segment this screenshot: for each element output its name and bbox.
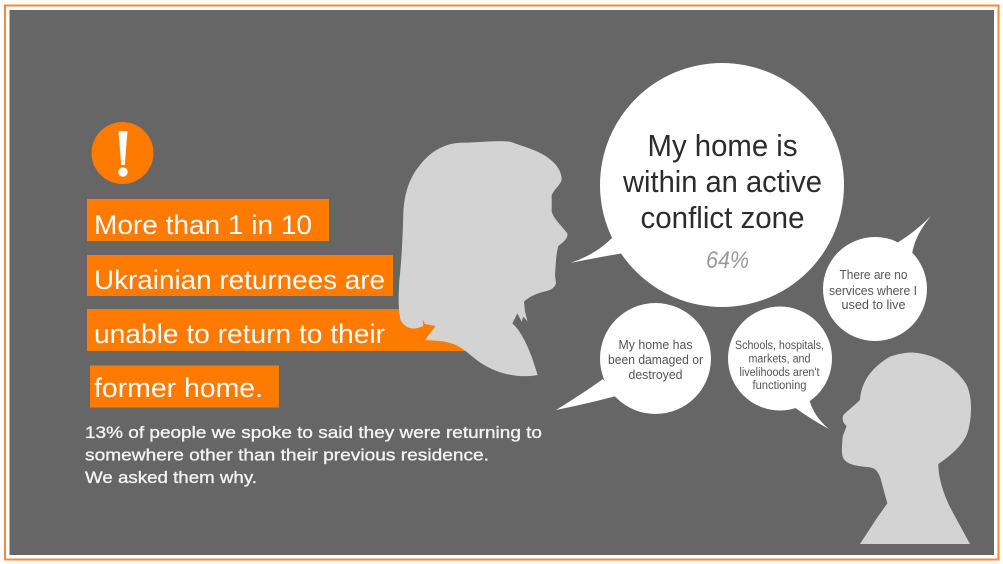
- callout: home damaged: been damaged or: [608, 352, 704, 367]
- callout: no services: There are no: [840, 268, 908, 282]
- text block: explanation: somewhere other than their previous residence.: [85, 446, 489, 464]
- callout: services not functioning: livelihoods aren't: [740, 367, 820, 379]
- callout: home damaged: My home has: [618, 337, 693, 352]
- callout: active conflict zone: My home is: [648, 128, 798, 163]
- heading: orange highlighted headline: More than 1 in 10: [94, 210, 312, 240]
- callout: services not functioning: functioning: [752, 380, 806, 392]
- callout: active conflict zone: within an active: [622, 164, 822, 199]
- text block: explanation: [85, 423, 542, 487]
- heading: orange highlighted headline: Ukrainian returnees are: [94, 265, 385, 295]
- callout: home damaged: [556, 303, 711, 414]
- callout: active conflict zone: [570, 63, 844, 307]
- text block: explanation: We asked them why.: [85, 468, 257, 487]
- callout: services not functioning: Schools, hospitals,: [735, 340, 824, 352]
- heading: orange highlighted headline: [87, 199, 467, 408]
- callout: active conflict zone: 64%: [706, 247, 749, 274]
- heading: orange highlighted headline: former home.: [94, 373, 263, 403]
- callout: no services: services where I: [829, 284, 917, 298]
- callout: services not functioning: [728, 306, 832, 429]
- callout: services not functioning: markets, and: [748, 354, 810, 366]
- callout: no services: [823, 216, 931, 341]
- icon: man silhouette: [842, 353, 971, 544]
- icon: exclamation mark: [92, 122, 154, 184]
- callout: no services: used to live: [842, 298, 906, 312]
- icon: woman silhouette: [399, 141, 567, 376]
- callout: active conflict zone: conflict zone: [640, 200, 804, 235]
- text block: explanation: 13% of people we spoke to said they were returning to: [85, 423, 542, 442]
- callout: home damaged: destroyed: [628, 367, 682, 382]
- heading: orange highlighted headline: unable to return to their: [94, 319, 385, 349]
